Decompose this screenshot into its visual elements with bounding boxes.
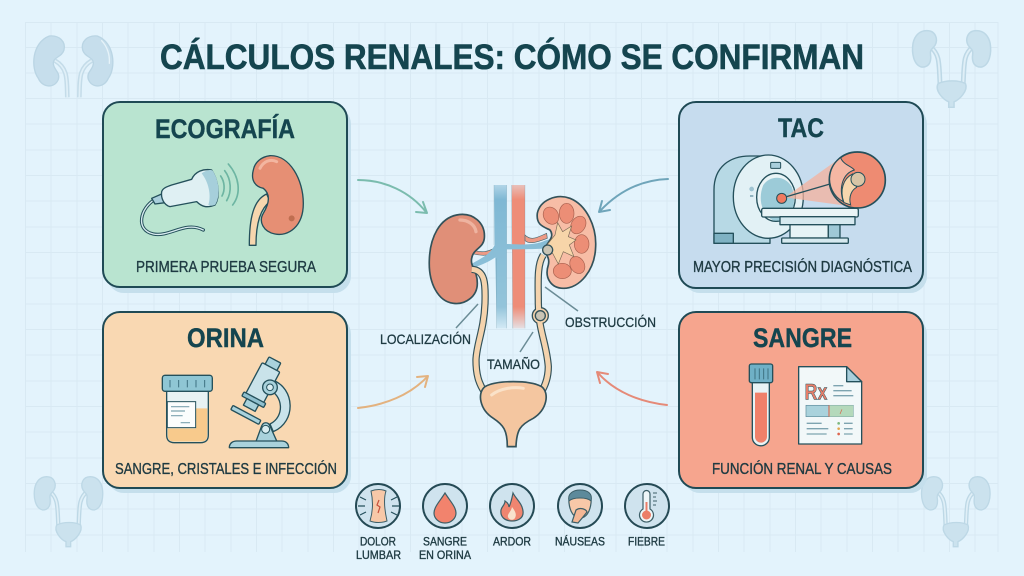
symptom: náuseas [555, 484, 605, 548]
symptom: náuseas: NÁUSEAS [555, 534, 605, 548]
symptom: ardor: ARDOR [493, 534, 531, 548]
icon: lab report [799, 367, 862, 444]
right kidney cross-section [537, 197, 596, 288]
panel: orina [103, 312, 351, 493]
kidney stones [535, 245, 553, 321]
icon: ct scanner [714, 152, 885, 243]
renal pelvis [545, 223, 576, 264]
aorta [512, 185, 525, 328]
arrow: orina to kidneys [358, 376, 428, 408]
arrow: tac to kidneys [599, 179, 668, 212]
icon: blood test tube [749, 364, 773, 446]
caption: primera prueba segura: PRIMERA PRUEBA SEGURA [136, 259, 317, 276]
symptom: fiebre [625, 484, 669, 548]
panel: ecografía [103, 102, 351, 293]
caption: función renal y causas: FUNCIÓN RENAL Y CAUSAS [712, 461, 892, 478]
symptom: ardor [490, 484, 534, 548]
decorative urinary system icon: bottom right [922, 477, 990, 547]
label: obstrucción: OBSTRUCCIÓN [565, 314, 656, 330]
caption: mayor precisión diagnóstica: MAYOR PRECISIÓN DIAGNÓSTICA [693, 259, 913, 276]
icon: microscope [229, 354, 290, 448]
symptom: sangre en orina: EN ORINA [419, 548, 471, 562]
decorative urinary system icon: bottom left [34, 477, 103, 547]
vena cava and renal veins [470, 185, 553, 328]
left kidney [429, 214, 484, 304]
label: tamaño: TAMAÑO [487, 356, 540, 372]
symptom: dolor lumbar: DOLOR [360, 534, 396, 548]
arrow: sangre to kidneys [597, 372, 667, 405]
icon: urine sample jar [162, 375, 212, 443]
heading: ecografía: ECOGRAFÍA [155, 113, 295, 144]
panel: tac [679, 102, 927, 293]
symptom: dolor lumbar: LUMBAR [356, 548, 401, 562]
title: CÁLCULOS RENALES: CÓMO SE CONFIRMAN [160, 37, 864, 77]
caption: sangre, cristales e infección: SANGRE, CRISTALES E INFECCIÓN [115, 461, 337, 478]
heading: orina: ORINA [187, 323, 264, 353]
label: localización: LOCALIZACIÓN [380, 331, 471, 347]
bladder [480, 382, 546, 447]
decorative urinary system icon: top right [913, 31, 991, 107]
symptom: dolor lumbar [356, 484, 401, 562]
symptom: sangre en orina: SANGRE [423, 534, 467, 548]
icon: kidney [249, 156, 303, 245]
panel: sangre [679, 312, 927, 493]
leader lines [456, 287, 578, 352]
arrow: ecografía to kidneys [358, 180, 427, 213]
decorative kidney icon: top left [34, 36, 113, 97]
symptom: sangre en orina [419, 484, 471, 562]
icon: ultrasound probe [142, 164, 238, 234]
heading: tac: TAC [778, 113, 824, 143]
heading: sangre: SANGRE [753, 323, 852, 353]
central urinary system diagram [429, 185, 596, 447]
icon: lab report: Rx [805, 379, 828, 404]
symptom: fiebre: FIEBRE [628, 534, 665, 548]
left ureter [472, 269, 485, 393]
right ureter [538, 255, 548, 394]
